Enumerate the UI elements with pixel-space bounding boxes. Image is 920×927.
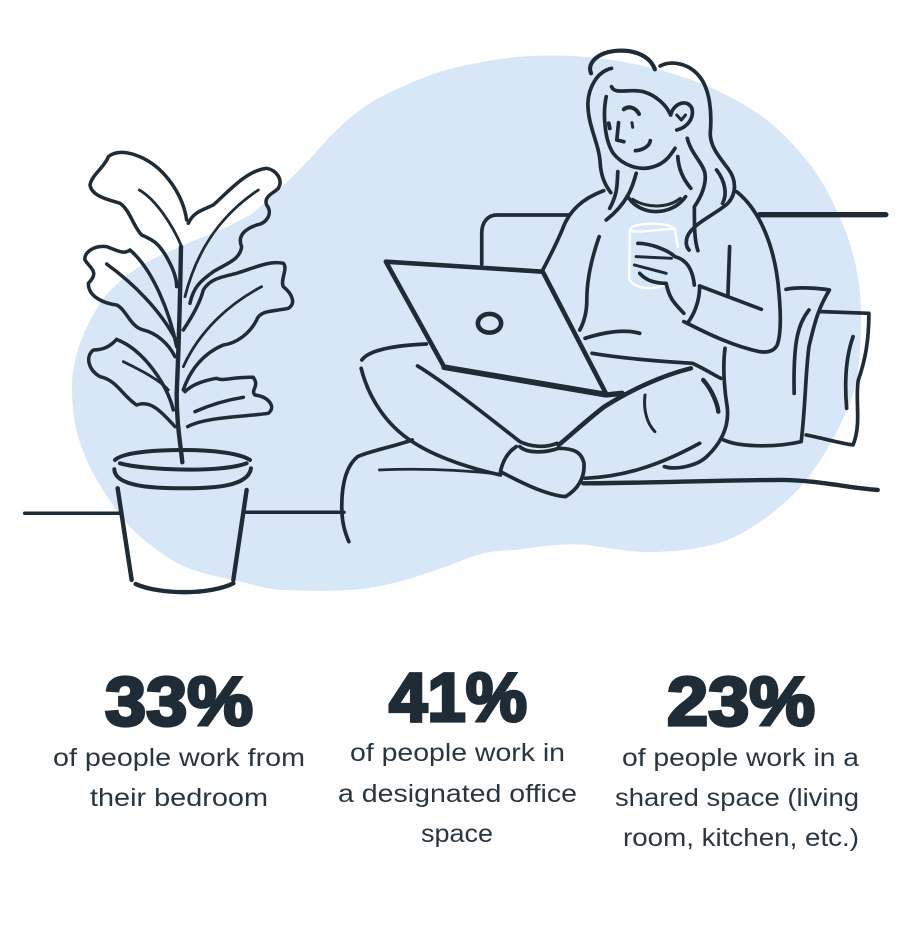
stat: 41% designated office: a designated office	[338, 780, 577, 808]
stat: 41% designated office: of people work in	[350, 739, 565, 767]
stat: 33% bedroom: their bedroom	[90, 784, 268, 812]
stat: 23% shared space: of people work in a	[622, 744, 859, 772]
stat: 33% bedroom: 33%	[105, 663, 253, 740]
foot	[500, 447, 584, 497]
hair	[588, 51, 734, 251]
sofa	[342, 215, 886, 542]
leaves	[85, 152, 293, 427]
face	[605, 97, 692, 168]
floor line	[25, 511, 344, 515]
stat: 33% bedroom: of people work from	[53, 744, 305, 772]
stem	[177, 247, 182, 462]
pot	[114, 450, 251, 592]
illustration: woman with laptop on sofa	[342, 51, 886, 542]
crossed legs	[361, 344, 718, 478]
stat: 23% shared space: shared space (living	[615, 784, 859, 812]
laptop	[386, 262, 622, 395]
stat: 41% designated office	[338, 659, 577, 848]
hand	[634, 243, 694, 313]
stat: 23% shared space: 23%	[667, 663, 815, 740]
stat: 41% designated office: space	[421, 820, 493, 848]
stat: 23% shared space	[615, 663, 859, 852]
stat: 23% shared space: room, kitchen, etc.)	[623, 824, 859, 852]
illustration: potted plant	[25, 152, 344, 592]
stat: 41% designated office: 41%	[389, 659, 527, 736]
sweater	[543, 191, 780, 468]
pillows	[724, 288, 869, 446]
background blob	[72, 56, 861, 591]
stat: 33% bedroom	[53, 663, 305, 812]
glass	[629, 224, 678, 288]
